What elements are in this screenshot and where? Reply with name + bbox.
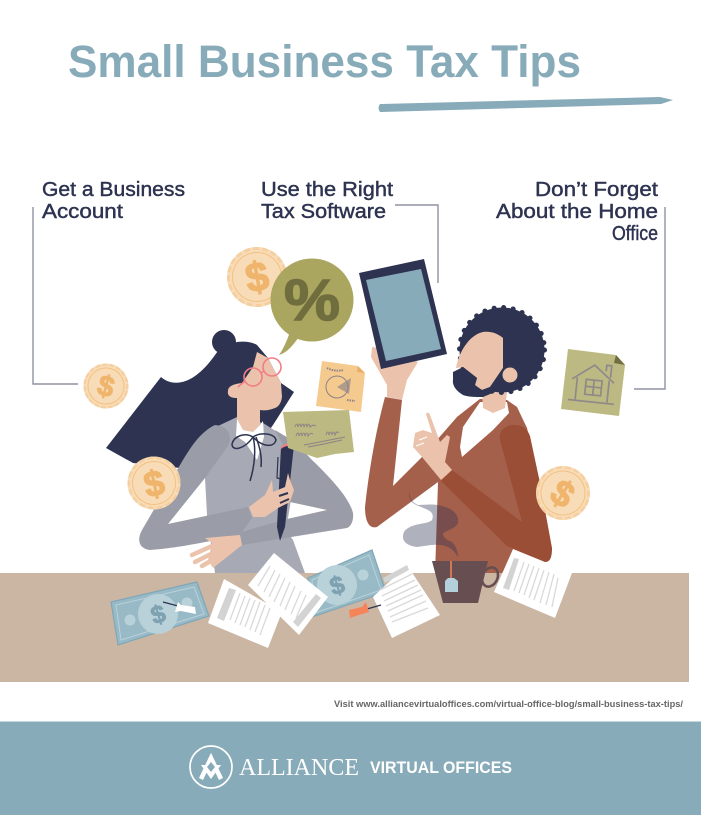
tip label: business account bbox=[42, 179, 185, 223]
tip label: home office: About the Home bbox=[496, 201, 658, 223]
icon: coin on woman's hair bbox=[123, 452, 185, 514]
man hair bbox=[460, 308, 544, 392]
steam bbox=[403, 492, 458, 557]
icon: coin by man's arm bbox=[526, 456, 600, 530]
tip label: home office: Office bbox=[612, 223, 658, 245]
icon: coin beside business account: $ bbox=[94, 369, 118, 405]
man beard bbox=[453, 367, 505, 397]
woman figure bbox=[106, 330, 353, 573]
icon: coin behind speech bubble: $ bbox=[242, 252, 272, 302]
pen bbox=[277, 443, 294, 541]
man ear bbox=[502, 368, 518, 382]
coffee cup bbox=[432, 561, 501, 603]
sticky note: pie chart bbox=[316, 361, 365, 412]
logo mark bbox=[190, 746, 232, 788]
paper: far right bbox=[494, 549, 572, 618]
woman upper hand bbox=[249, 473, 294, 517]
woman finger lines bbox=[279, 493, 289, 503]
connector: business account to coin bbox=[33, 207, 78, 384]
woman right arm bbox=[238, 430, 353, 545]
man pointing hand bbox=[413, 413, 452, 480]
orange push pin bbox=[349, 602, 381, 618]
logo wordmark: ALLIANCE bbox=[239, 755, 359, 781]
woman hair bbox=[106, 330, 294, 470]
tip label: tax software: Use the Right bbox=[261, 179, 393, 201]
glasses bbox=[238, 358, 281, 387]
paper: upper left bbox=[248, 553, 328, 635]
icon: coin by man's arm: $ bbox=[543, 471, 582, 516]
woman bow bbox=[232, 434, 276, 481]
paper: lower left bbox=[208, 579, 282, 648]
logo tagline: VIRTUAL OFFICES bbox=[370, 759, 512, 777]
money bill: left: $ bbox=[148, 600, 169, 630]
man face bbox=[456, 332, 503, 390]
speech bubble with percent: % bbox=[284, 268, 340, 333]
tip label: home office: Don’t Forget bbox=[535, 179, 658, 201]
icon: coin behind speech bubble bbox=[222, 242, 292, 312]
man shirt bbox=[460, 402, 509, 457]
woman body bbox=[205, 417, 305, 573]
man vest bbox=[435, 399, 552, 575]
money bill: left bbox=[111, 582, 209, 645]
woman left arm bbox=[139, 425, 252, 550]
tip label: business account: Get a Business bbox=[42, 179, 185, 201]
man raised arm bbox=[365, 397, 480, 527]
desk bbox=[0, 573, 689, 682]
man figure bbox=[359, 259, 552, 575]
speech bubble with percent bbox=[270, 258, 354, 355]
woman collar bbox=[236, 419, 264, 460]
paper: lower right bbox=[373, 565, 440, 638]
icon: coin on woman's hair: $ bbox=[140, 461, 168, 506]
woman lower hand bbox=[192, 535, 242, 568]
white push pin bbox=[163, 602, 196, 614]
connector: home office to note bbox=[634, 207, 665, 389]
source note: Visit www.alliancevirtualoffices.com/virtual-office-blog/small-business-tax-tips/ bbox=[334, 699, 684, 709]
tip label: tax software: Tax Software bbox=[261, 201, 386, 223]
man raised hand bbox=[371, 347, 418, 400]
tablet bbox=[359, 259, 447, 369]
tip label: tax software bbox=[261, 179, 393, 223]
icon: coin beside business account bbox=[78, 358, 134, 414]
sticky note: house bbox=[561, 349, 625, 416]
tip label: home office bbox=[496, 179, 658, 245]
man dark arm bbox=[441, 425, 552, 562]
sticky note: handwriting bbox=[283, 410, 354, 458]
title: Small Business Tax Tips bbox=[68, 36, 581, 87]
woman neck and face bbox=[228, 352, 282, 432]
footer band bbox=[0, 721, 701, 815]
title brush underline bbox=[378, 97, 673, 112]
money bill: centre bbox=[308, 550, 386, 617]
man neck bbox=[482, 385, 508, 413]
tip label: business account: Account bbox=[42, 201, 123, 223]
money bill: centre: $ bbox=[327, 571, 348, 601]
connector: tax software to tablet bbox=[395, 205, 438, 283]
